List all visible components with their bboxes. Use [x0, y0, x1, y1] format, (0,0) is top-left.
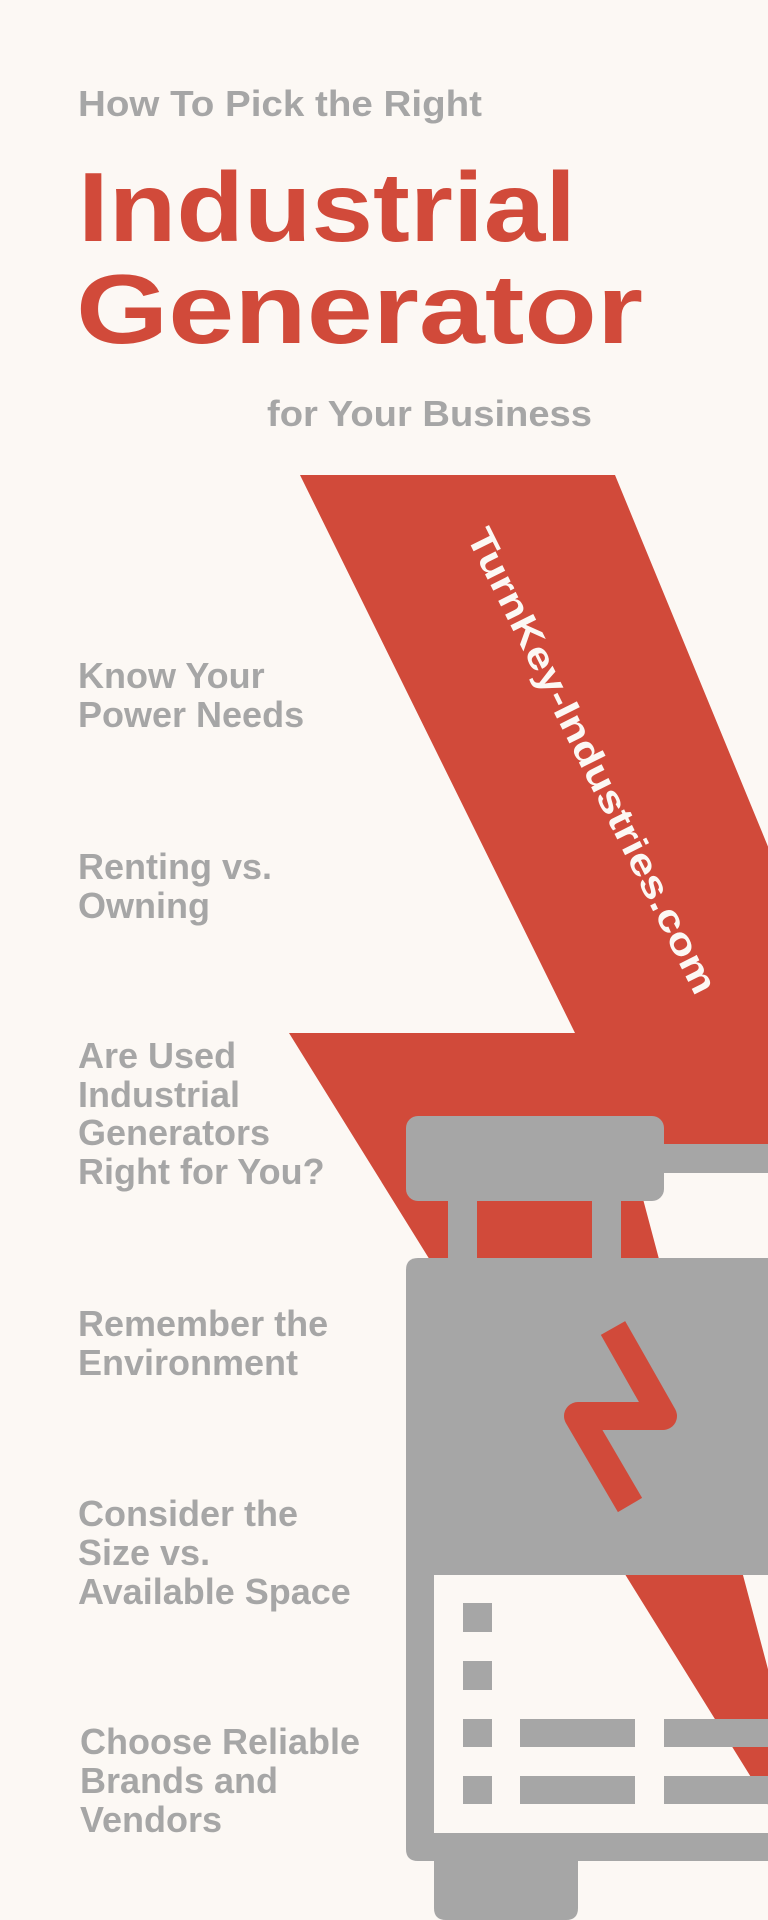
item: used generators: Are Used: [78, 1035, 236, 1076]
item: power needs: Power Needs: [78, 694, 304, 735]
title: Generator: [76, 254, 643, 364]
icon: small bolt on generator: [578, 1328, 663, 1505]
item: environment: Environment: [78, 1342, 298, 1383]
title: Industrial: [78, 152, 576, 262]
item: used generators: Generators: [78, 1112, 270, 1153]
item: renting: Owning: [78, 885, 210, 926]
item: size: Size vs.: [78, 1532, 210, 1573]
item: brands: Brands and: [80, 1760, 278, 1801]
item: used generators: Industrial: [78, 1074, 240, 1115]
title: for Your Business: [267, 393, 592, 434]
lightning bolt: [289, 475, 768, 1840]
item: size: Consider the: [78, 1493, 298, 1534]
item: brands: Vendors: [80, 1799, 222, 1840]
item: used generators: Right for You?: [78, 1151, 325, 1192]
item: brands: Choose Reliable: [80, 1721, 360, 1762]
title: [76, 83, 643, 434]
icon: generator: [406, 1116, 768, 1920]
website text: TurnKey-Industries.com: [459, 521, 725, 1000]
item: size: Available Space: [78, 1571, 351, 1612]
item: environment: Remember the: [78, 1303, 328, 1344]
item: power needs: Know Your: [78, 655, 265, 696]
item: renting: Renting vs.: [78, 846, 272, 887]
title: How To Pick the Right: [78, 83, 482, 124]
